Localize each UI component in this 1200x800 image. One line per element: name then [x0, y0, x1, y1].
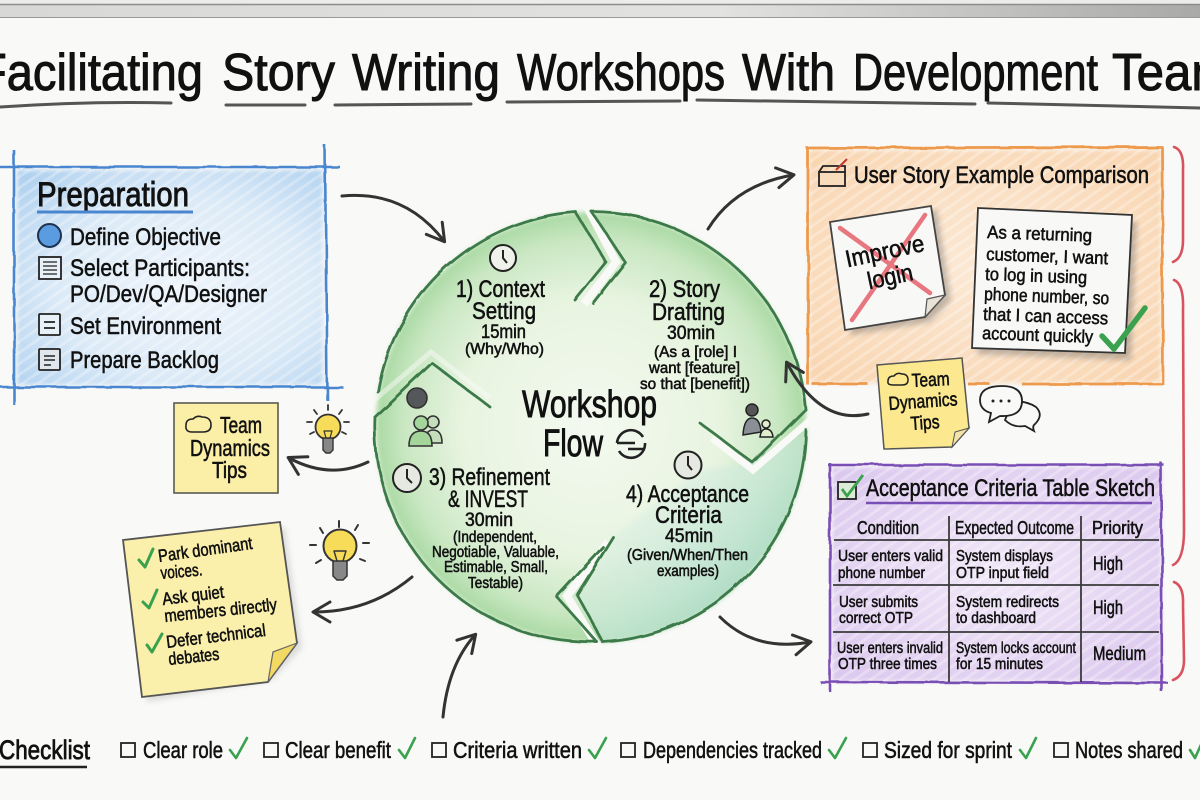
icon: clock 4: [674, 452, 702, 478]
icon: light bulb large: [310, 521, 369, 580]
step 2: story drafting: (As a [role] I: [654, 344, 737, 361]
title: With: [742, 44, 835, 102]
icon: cloud: [186, 416, 211, 432]
step 4: acceptance criteria: (Given/When/Then: [627, 547, 748, 564]
red cross: [840, 215, 930, 320]
icon: cycle: [617, 430, 645, 458]
sticky note: team dynamics checklist: debates: [167, 644, 220, 669]
table rows: System redirects: [956, 594, 1059, 611]
step 1: context setting: Setting: [472, 298, 536, 325]
preparation list: Set Environment: [70, 313, 221, 340]
panel: workshop flow circle: [365, 203, 815, 652]
step 4: acceptance criteria: 45min: [665, 526, 713, 547]
title: Workshops: [517, 44, 725, 102]
heading: checklist: Checklist: [0, 735, 90, 765]
icon: target: [38, 224, 61, 247]
step 2: story drafting: so that [benefit]): [640, 376, 750, 393]
preparation list: Select Participants:: [70, 255, 250, 282]
step 3: refinement and invest: 3) Refinement: [429, 464, 550, 491]
arrow: to sticky note: [314, 577, 412, 612]
title: Story: [222, 44, 335, 102]
step 3: refinement and invest: (Independent,: [453, 529, 537, 546]
center label: workshop flow: [522, 384, 657, 465]
sticky note: team dynamics tips left: [174, 403, 278, 493]
note: bad example: Improve: [843, 230, 927, 273]
step 4: acceptance criteria: examples): [657, 563, 719, 580]
table rows: User enters invalid: [837, 640, 943, 657]
note: good example: [972, 208, 1145, 360]
table header: Expected Outcome: [955, 518, 1074, 538]
arrow: to user story panel: [708, 175, 793, 229]
panel: user story example comparison: [806, 147, 1163, 385]
table rows: to dashboard: [956, 610, 1036, 627]
sticky note: team dynamics checklist: members directly: [163, 594, 278, 626]
table rows: System locks account: [956, 640, 1076, 657]
panel: preparation: [0, 145, 343, 405]
sticky note: team dynamics checklist: voices.: [160, 559, 203, 583]
checklist labels: Dependencies tracked: [643, 737, 822, 763]
icon: clock 1: [490, 245, 516, 271]
step 3: refinement and invest: Estimable, Small,: [444, 559, 548, 576]
icon: cloud: [888, 373, 908, 385]
table rows: OTP input field: [956, 565, 1049, 582]
icon: light bulb small: [307, 405, 349, 453]
table rows: High: [1093, 598, 1123, 619]
center label: workshop flow: Flow: [543, 423, 603, 465]
preparation list: Prepare Backlog: [70, 347, 219, 374]
step 1: context setting: (Why/Who): [465, 341, 544, 358]
step 2: story drafting: 30min: [667, 323, 715, 344]
table rows: [837, 548, 1146, 673]
note: good example: customer, I want: [986, 244, 1108, 268]
table rows: User enters valid: [838, 548, 943, 565]
table rows: OTP three times: [838, 656, 937, 673]
icons: green checks: [139, 549, 162, 652]
step 4: acceptance criteria: [626, 452, 749, 580]
checklist: [0, 735, 1200, 767]
note: good example: to log in using: [985, 264, 1087, 288]
step 1: context setting: 1) Context: [456, 276, 545, 303]
checklist labels: Clear benefit: [285, 737, 391, 763]
step 3: refinement and invest: & INVEST: [448, 486, 528, 513]
heading: preparation: Preparation: [37, 176, 189, 214]
table grid: [833, 516, 1159, 682]
icon: backlog: [39, 349, 60, 370]
table header: Condition: [857, 518, 919, 538]
sticky note: team dynamics tips right: [877, 358, 969, 449]
table rows: System displays: [956, 548, 1053, 565]
sticky note: team dynamics checklist: Park dominant: [157, 533, 254, 566]
sticky note: team dynamics tips left: Dynamics: [190, 435, 270, 461]
sticky note: team dynamics tips right: Tips: [910, 412, 940, 435]
note: good example: account quickly: [982, 323, 1093, 347]
table rows: User submits: [839, 594, 918, 611]
checklist labels: Sized for sprint: [884, 737, 1013, 763]
checklist labels: [143, 737, 1183, 763]
table header: [857, 518, 1143, 538]
step 3: refinement and invest: Negotiable, Valuable,: [432, 544, 559, 561]
sticky note: team dynamics tips left: Team: [220, 412, 262, 438]
sticky note: team dynamics tips right: Dynamics: [888, 389, 958, 415]
note: bad example: [830, 206, 951, 335]
arrow: to acceptance criteria table: [720, 617, 810, 644]
step 1: context setting: [456, 245, 545, 358]
icon: people: [407, 388, 442, 446]
title: Development: [853, 44, 1098, 102]
step 2: story drafting: [640, 276, 773, 437]
title: [0, 44, 1200, 108]
step 4: acceptance criteria: Criteria: [655, 502, 723, 529]
arrow: to flow circle from preparation: [342, 195, 444, 241]
sticky note: team dynamics tips left: Tips: [212, 457, 247, 483]
title: Writing: [352, 44, 500, 102]
sticky note: team dynamics tips right: Team: [911, 369, 950, 392]
checklist checks: [230, 738, 1200, 758]
sticky note: team dynamics checklist: [123, 522, 302, 702]
checklist boxes: [121, 743, 1068, 757]
note: bad example: login: [865, 259, 916, 295]
icon: environment: [39, 314, 60, 335]
whiteboard tray: [0, 0, 1200, 18]
table header: Priority: [1092, 518, 1143, 538]
table rows: High: [1093, 554, 1123, 575]
checklist labels: Clear role: [143, 737, 223, 763]
arrow: to team dynamics tips: [289, 458, 368, 470]
preparation list: Define Objective: [70, 224, 221, 251]
step 3: refinement and invest: 30min: [465, 510, 513, 531]
sticky note: team dynamics checklist: Ask quiet: [161, 582, 225, 609]
step 2: story drafting: 2) Story: [649, 276, 720, 303]
icon: box with pencil: [819, 159, 847, 186]
arrow: from checklist to flow circle: [443, 635, 475, 717]
note: good example: As a returning: [987, 222, 1092, 246]
center label: workshop flow: Workshop: [522, 384, 657, 426]
arrow: from team tips to flow circle: [787, 363, 868, 416]
step 2: story drafting: Drafting: [652, 299, 725, 326]
red braces: [1173, 147, 1184, 680]
icon: speech bubbles: [980, 386, 1040, 431]
icon: green checkbox: [838, 475, 863, 499]
icon: clock 3: [393, 464, 421, 492]
checklist labels: Criteria written: [453, 737, 582, 763]
table rows: Medium: [1093, 644, 1146, 665]
step 3: refinement and invest: Testable): [468, 575, 523, 592]
step 4: acceptance criteria: 4) Acceptance: [626, 481, 749, 508]
note: good example: phone number, so: [984, 284, 1109, 308]
icon: green check: [1102, 308, 1145, 349]
preparation list: PO/Dev/QA/Designer: [70, 281, 267, 308]
preparation list: [70, 224, 267, 374]
heading: user story example comparison: User Story Example Comparison: [854, 162, 1149, 189]
step 3: refinement and invest: [393, 388, 559, 592]
note: good example: that I can access: [983, 304, 1108, 328]
sticky note: team dynamics checklist: Defer technical: [165, 620, 267, 652]
table rows: correct OTP: [839, 610, 913, 627]
table rows: phone number: [838, 565, 926, 582]
icon: facilitator with person: [743, 404, 773, 437]
table rows: for 15 minutes: [956, 656, 1043, 673]
icon: participants list: [39, 257, 61, 279]
step 1: context setting: 15min: [481, 322, 526, 343]
step 2: story drafting: want [feature]: [648, 360, 740, 377]
panel: acceptance criteria table: [820, 462, 1168, 692]
